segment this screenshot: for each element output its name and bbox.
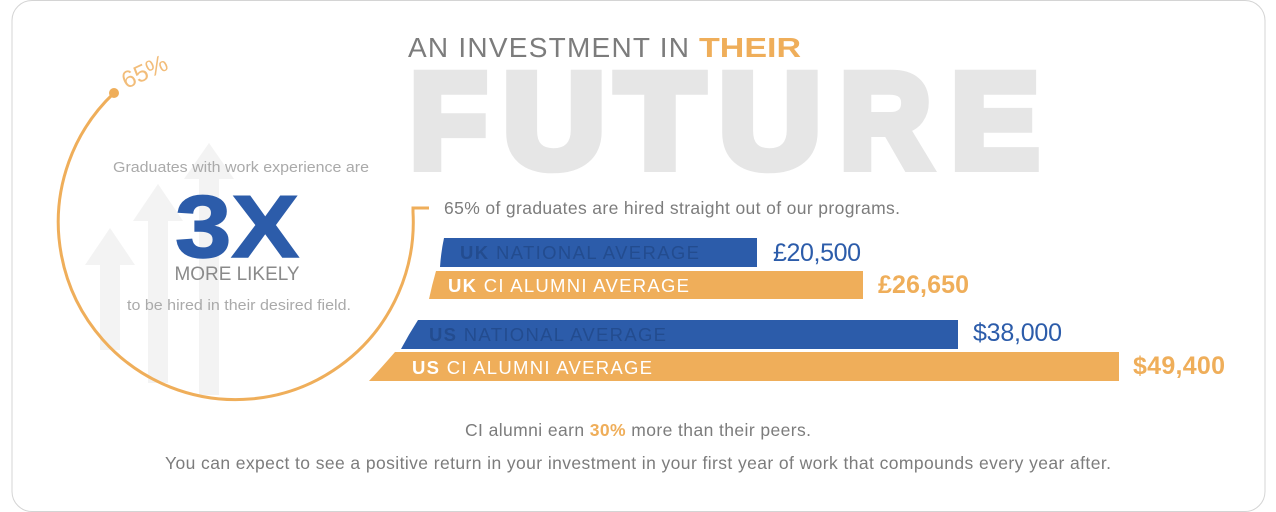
icon: rising arrows [85, 143, 234, 395]
text: more likely: MORE LIKELY [174, 264, 300, 285]
title word: FUTURE: R [840, 47, 931, 196]
bar: US CI alumni: US CI ALUMNI AVERAGE [412, 357, 652, 378]
value: UK CI alumni: £26,650 [878, 271, 969, 299]
text: return statement: You can expect to see a positive return in your investment in your first year of work that compounds every year after. [165, 453, 1111, 473]
bar: US CI alumni [369, 352, 1119, 381]
bar: UK national: UK NATIONAL AVERAGE [460, 242, 699, 263]
bar: UK CI alumni [429, 271, 863, 299]
title word: FUTURE: E [951, 47, 1039, 196]
bar: UK CI alumni: UK CI ALUMNI AVERAGE [448, 275, 689, 296]
title line: THEIR [699, 32, 801, 63]
ring label 65%: 65% [117, 50, 172, 95]
title word: FUTURE [410, 47, 1039, 196]
text: graduates intro: Graduates with work experience are [113, 159, 369, 176]
value: US CI alumni: $49,400 [1133, 352, 1225, 380]
text: hired statement: 65% of graduates are hired straight out of our programs. [444, 198, 900, 218]
bar: UK national [440, 238, 757, 267]
title word: FUTURE: T [616, 47, 704, 196]
bar: US national [401, 320, 958, 349]
progress ring 65% [58, 88, 429, 400]
value: US national: $38,000 [973, 319, 1062, 347]
stat: 3X: 3X [175, 177, 299, 276]
text: desired field: to be hired in their desired field. [127, 297, 351, 314]
bar: US national: US NATIONAL AVERAGE [429, 324, 666, 345]
title word: FUTURE: U [719, 47, 821, 196]
title word: FUTURE: F [410, 47, 487, 196]
title line: AN INVESTMENT IN [408, 32, 689, 63]
text: earnings statement: CI alumni earn 30% more than their peers. [465, 420, 811, 440]
title word: FUTURE: U [503, 47, 605, 196]
value: UK national: £20,500 [773, 239, 861, 267]
